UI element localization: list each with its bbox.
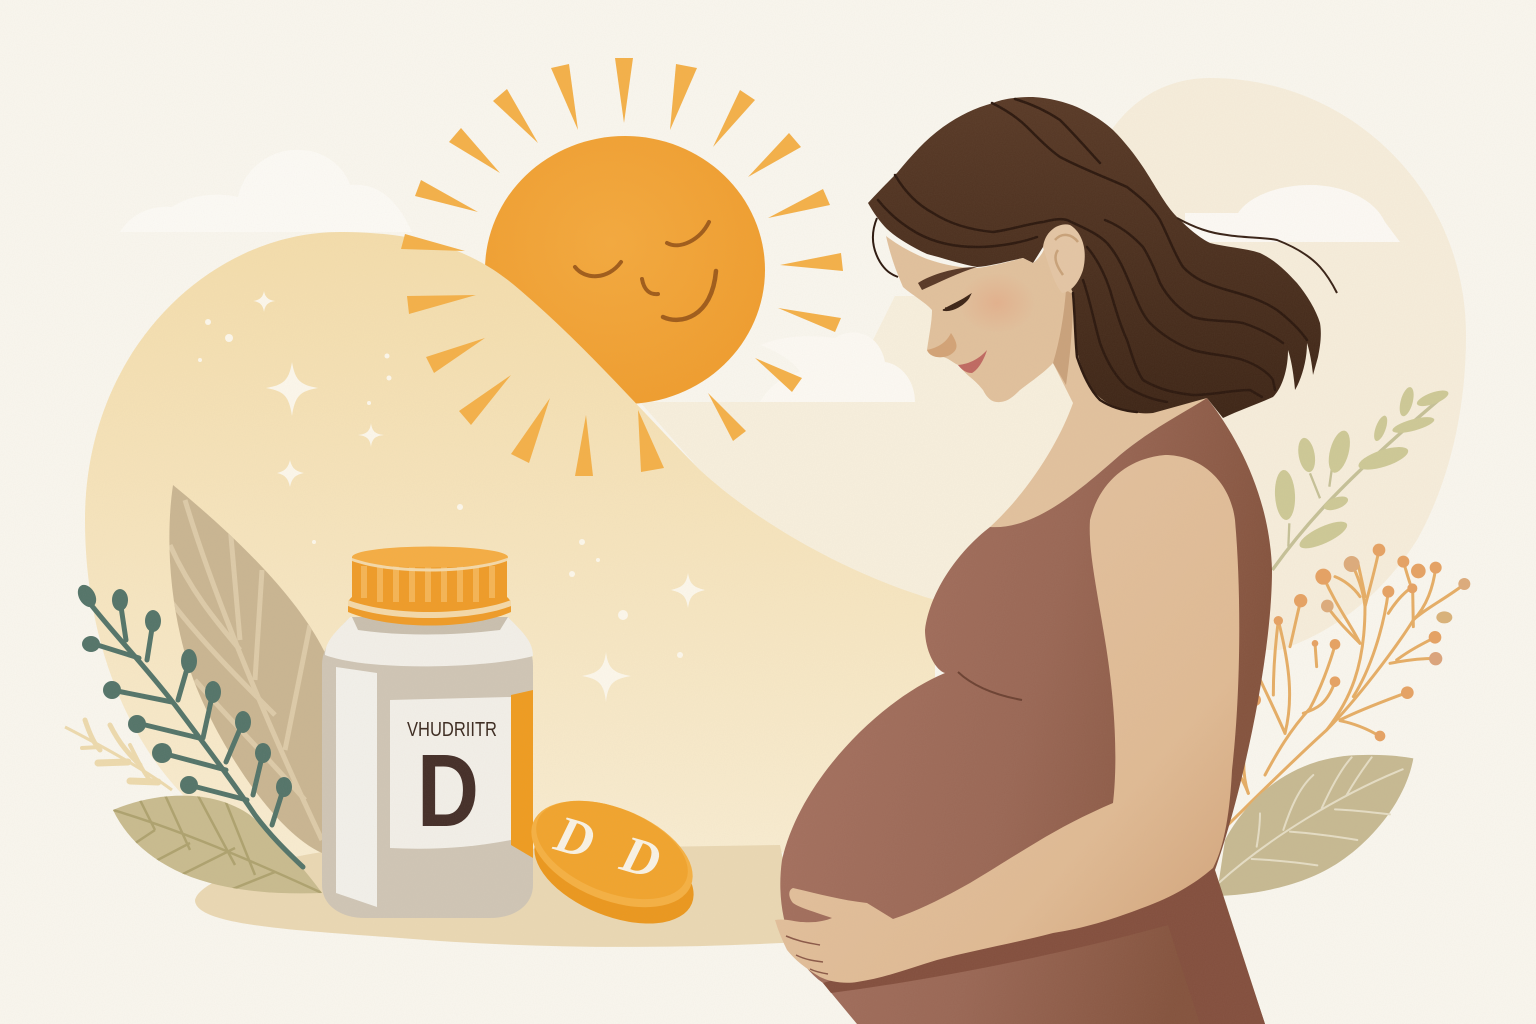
closed eye <box>943 295 970 310</box>
label large D: D <box>417 733 479 848</box>
plant: large tan leaf <box>169 485 326 853</box>
plant: sage sprig <box>1272 386 1450 570</box>
plant: olive leaf <box>113 790 322 893</box>
arm and hand <box>775 455 1239 983</box>
orange band <box>511 690 533 858</box>
sun face <box>575 222 716 320</box>
bottle body <box>322 617 533 918</box>
dress crease <box>958 672 1022 700</box>
cloud: middle <box>760 332 915 402</box>
eyebrow <box>918 267 977 290</box>
ear <box>1043 224 1085 293</box>
sparkles <box>198 291 705 702</box>
loose hair strand <box>1177 218 1337 293</box>
plants: right side <box>1217 386 1470 896</box>
background circle: right <box>1080 78 1466 650</box>
front label <box>390 697 511 849</box>
vitamin D pill: D <box>614 825 666 891</box>
bottle shoulder <box>325 617 533 666</box>
cheek blush <box>959 273 1035 333</box>
horizon band <box>640 296 1090 640</box>
plant: green branch <box>74 582 303 867</box>
vitamin D pill <box>516 780 708 944</box>
sun rays <box>401 58 843 476</box>
sun <box>485 136 765 404</box>
nose shade <box>927 333 957 357</box>
vitamin D bottle <box>322 546 533 918</box>
plant: sage leaf <box>1217 755 1413 896</box>
woman <box>775 97 1337 1024</box>
bottle side strip <box>336 667 377 907</box>
plant: orange branches <box>1226 544 1470 827</box>
plant: pale sprig <box>65 720 172 790</box>
dress <box>780 398 1272 1024</box>
vitamin D pill: D <box>548 805 600 871</box>
hair <box>868 97 1337 418</box>
lips <box>958 350 987 373</box>
face <box>873 218 1085 402</box>
bottle cap <box>348 557 511 626</box>
dress lower shadow <box>823 868 1265 1024</box>
ground shadow <box>195 845 800 947</box>
cloud: right <box>1185 185 1400 242</box>
cloud: left <box>120 150 412 232</box>
fringe strand <box>873 218 898 277</box>
neck shadow <box>1053 290 1074 385</box>
neck and chest <box>990 285 1210 528</box>
hill <box>85 232 935 860</box>
label small text: VHUDRIITR <box>407 719 497 741</box>
